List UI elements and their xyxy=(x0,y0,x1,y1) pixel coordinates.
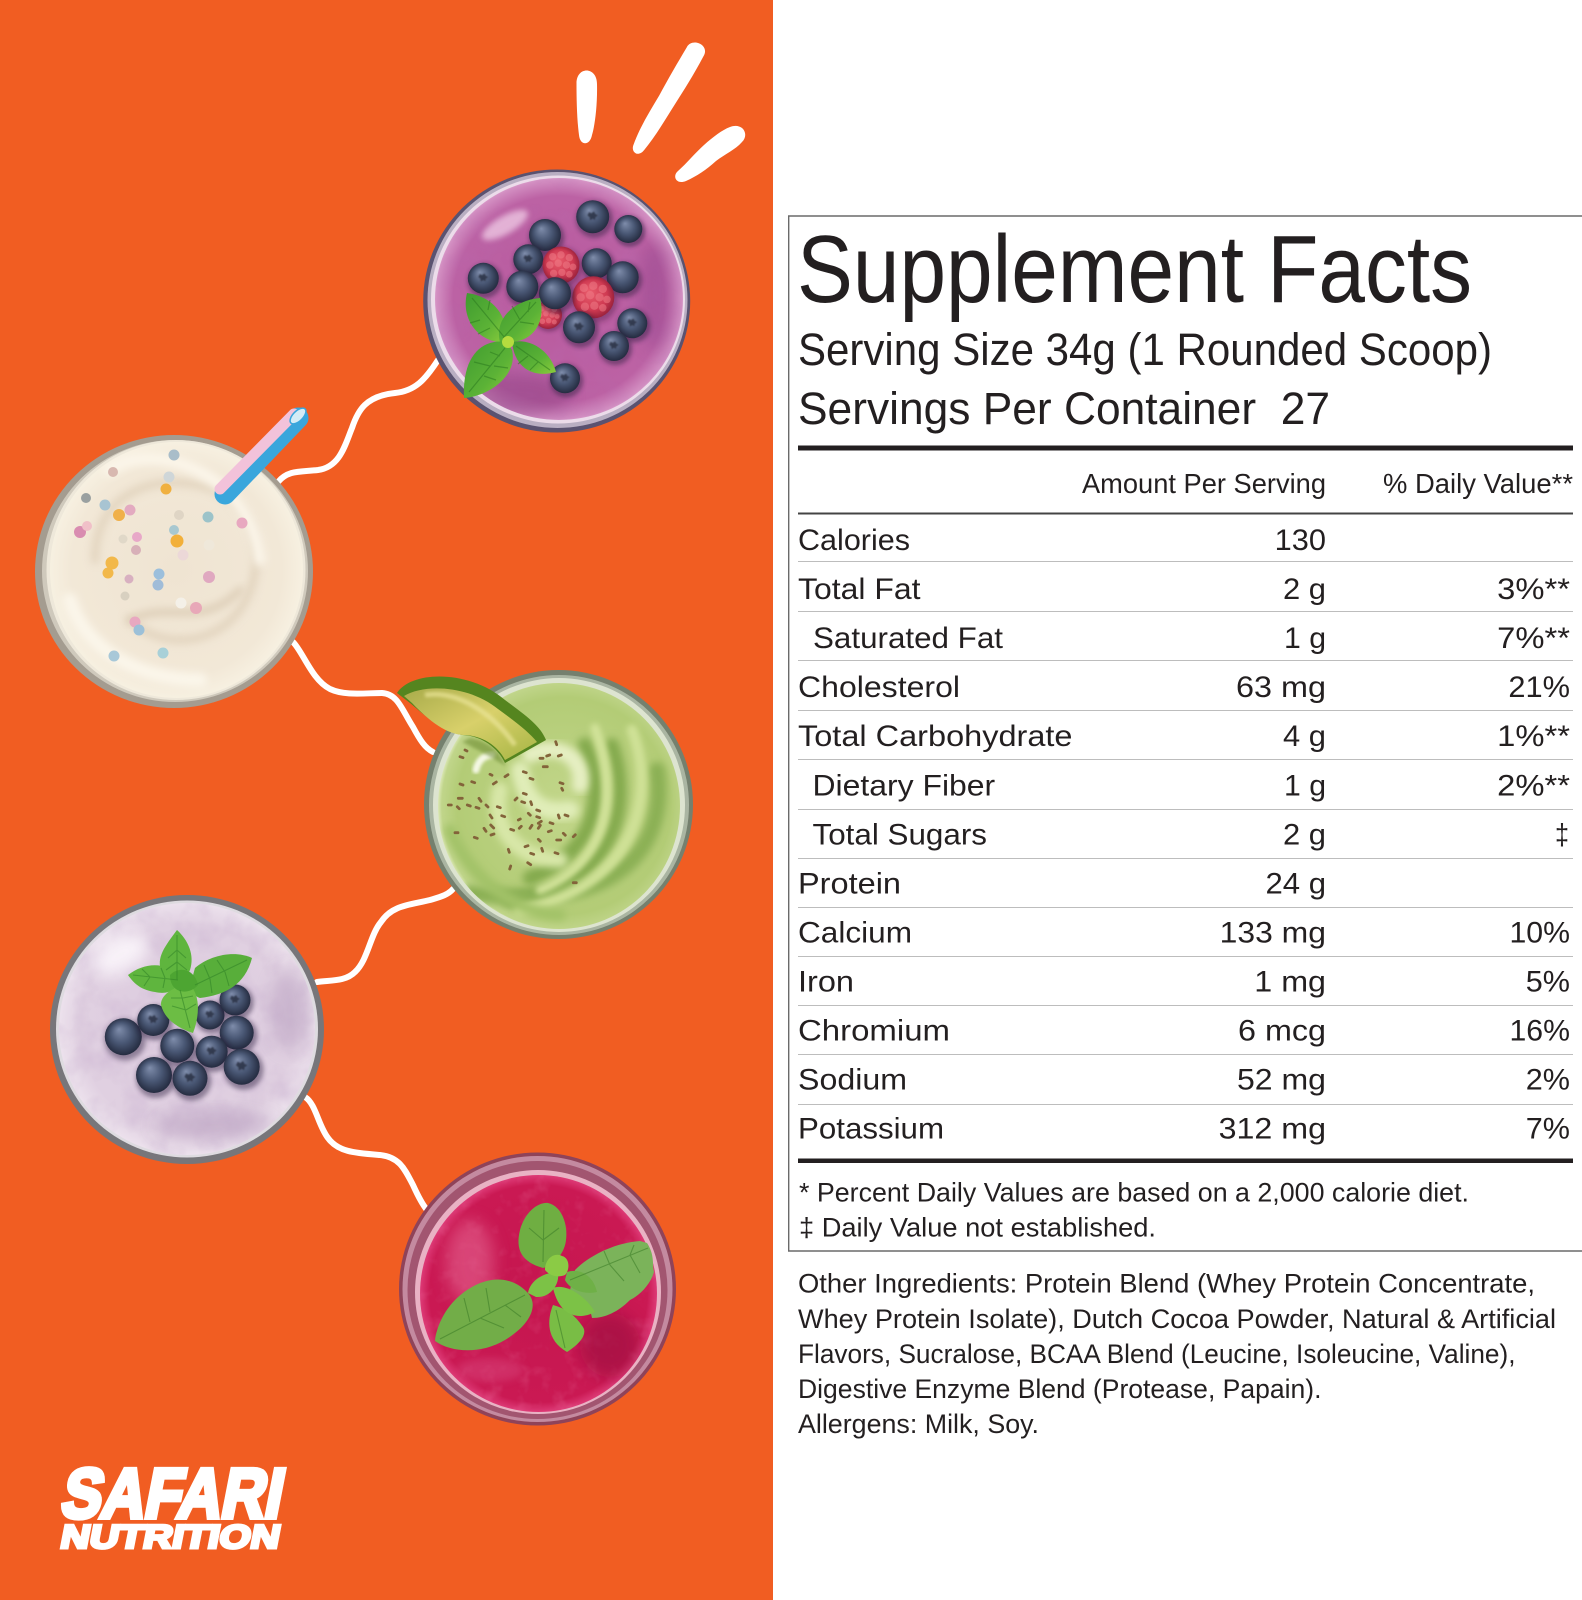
smoothie: purple berry bowl xyxy=(423,170,690,432)
row: saturated fat: 1 g xyxy=(1284,622,1326,655)
row: calcium xyxy=(798,916,1570,950)
row: potassium: 7% xyxy=(1526,1112,1570,1146)
smoothie: green avocado bowl xyxy=(397,670,693,939)
row: iron: Iron xyxy=(798,966,854,998)
row: protein xyxy=(798,868,1326,900)
row: sodium: Sodium xyxy=(798,1064,907,1096)
logo: Safari Nutrition: NUTRITION xyxy=(57,1519,284,1556)
row: iron xyxy=(798,966,1570,998)
footnotes: * Percent Daily Values are based on a 2,000 calorie diet. xyxy=(799,1178,1469,1208)
text block: other ingredients and allergens: Flavors, Sucralose, BCAA Blend (Leucine, Isoleucine, Valine), xyxy=(798,1339,1516,1369)
row: potassium: 312 mg xyxy=(1219,1112,1326,1146)
text block: other ingredients and allergens: Allergens: Milk, Soy. xyxy=(798,1409,1039,1439)
row: sodium xyxy=(798,1064,1570,1096)
row: saturated fat xyxy=(813,622,1570,655)
row: saturated fat: Saturated Fat xyxy=(813,622,1004,655)
row: total fat: 2 g xyxy=(1283,573,1326,606)
panel: orange background xyxy=(0,0,773,1600)
row: total sugars: ‡ xyxy=(1555,818,1569,852)
serving info: Serving Size 34g (1 Rounded Scoop) xyxy=(798,324,1492,375)
text block: other ingredients and allergens: Digestive Enzyme Blend (Protease, Papain). xyxy=(798,1374,1322,1404)
row: total sugars: Total Sugars xyxy=(812,818,987,852)
mint sprig xyxy=(128,930,252,1033)
smoothie: red beet bowl xyxy=(399,1152,676,1426)
row: calcium: 10% xyxy=(1510,916,1570,950)
row: total carbohydrate: 4 g xyxy=(1283,720,1326,753)
row: cholesterol xyxy=(798,671,1570,704)
row: saturated fat: 7%** xyxy=(1497,622,1570,655)
berries xyxy=(467,200,651,398)
serving info: Servings Per Container 27 xyxy=(798,383,1330,434)
table header: % Daily Value** xyxy=(1383,468,1573,499)
row: calories: 130 xyxy=(1275,524,1326,557)
row: total carbohydrate xyxy=(798,720,1570,753)
row: dietary fiber xyxy=(812,770,1570,802)
mint sprig xyxy=(435,1203,654,1352)
row: protein: Protein xyxy=(798,868,901,900)
row: dietary fiber: Dietary Fiber xyxy=(812,770,995,802)
row: total carbohydrate: Total Carbohydrate xyxy=(798,720,1072,753)
text block: other ingredients and allergens xyxy=(798,1268,1556,1439)
row: sodium: 2% xyxy=(1526,1064,1570,1096)
row: total fat xyxy=(798,573,1570,606)
footnotes: ‡ Daily Value not established. xyxy=(799,1212,1156,1242)
seeds xyxy=(448,742,576,883)
row: total fat: Total Fat xyxy=(798,573,921,606)
icon: burst rays xyxy=(576,43,745,182)
row: total sugars: 2 g xyxy=(1283,818,1326,852)
row: chromium: 16% xyxy=(1510,1014,1570,1048)
sprinkles xyxy=(74,450,248,662)
row: total fat: 3%** xyxy=(1497,573,1570,606)
row: calcium: Calcium xyxy=(798,916,912,950)
logo: Safari Nutrition: SAFARI xyxy=(56,1454,291,1532)
row: protein: 24 g xyxy=(1266,868,1326,900)
table header xyxy=(1082,468,1573,499)
smoothie: cream sprinkles shake xyxy=(35,405,313,708)
row: sodium: 52 mg xyxy=(1237,1064,1326,1096)
row: total carbohydrate: 1%** xyxy=(1497,720,1570,753)
row: potassium xyxy=(798,1112,1570,1146)
row: dietary fiber: 2%** xyxy=(1497,770,1570,802)
row: potassium: Potassium xyxy=(798,1112,944,1146)
row: total sugars xyxy=(812,818,1569,852)
logo: Safari Nutrition xyxy=(56,1454,291,1556)
row: calories xyxy=(798,524,1326,557)
mint sprig xyxy=(464,293,556,398)
row: iron: 5% xyxy=(1526,966,1570,998)
row: calories: Calories xyxy=(798,524,910,557)
footnotes xyxy=(799,1178,1469,1242)
text block: other ingredients and allergens: Whey Protein Isolate), Dutch Cocoa Powder, Natural & Artificial xyxy=(798,1304,1556,1334)
title: Supplement Facts xyxy=(797,216,1472,323)
row: chromium xyxy=(798,1014,1570,1048)
row: dietary fiber: 1 g xyxy=(1284,770,1326,802)
row: cholesterol: 63 mg xyxy=(1236,671,1326,704)
row: chromium: 6 mcg xyxy=(1238,1014,1326,1048)
row: chromium: Chromium xyxy=(798,1014,950,1048)
panel: supplement facts xyxy=(789,216,1582,1251)
text block: other ingredients and allergens: Other Ingredients: Protein Blend (Whey Protein Concentrate, xyxy=(798,1268,1535,1298)
row: cholesterol: Cholesterol xyxy=(798,671,960,704)
serving info xyxy=(798,324,1492,434)
blueberries xyxy=(104,984,264,1101)
row: iron: 1 mg xyxy=(1254,966,1326,998)
avocado slice xyxy=(397,677,546,766)
row: calcium: 133 mg xyxy=(1220,916,1326,950)
row: cholesterol: 21% xyxy=(1508,671,1570,704)
smoothie: lavender blueberry bowl xyxy=(50,895,324,1164)
connector lines xyxy=(278,360,453,1210)
straw xyxy=(220,405,309,494)
table header: Amount Per Serving xyxy=(1082,468,1326,499)
